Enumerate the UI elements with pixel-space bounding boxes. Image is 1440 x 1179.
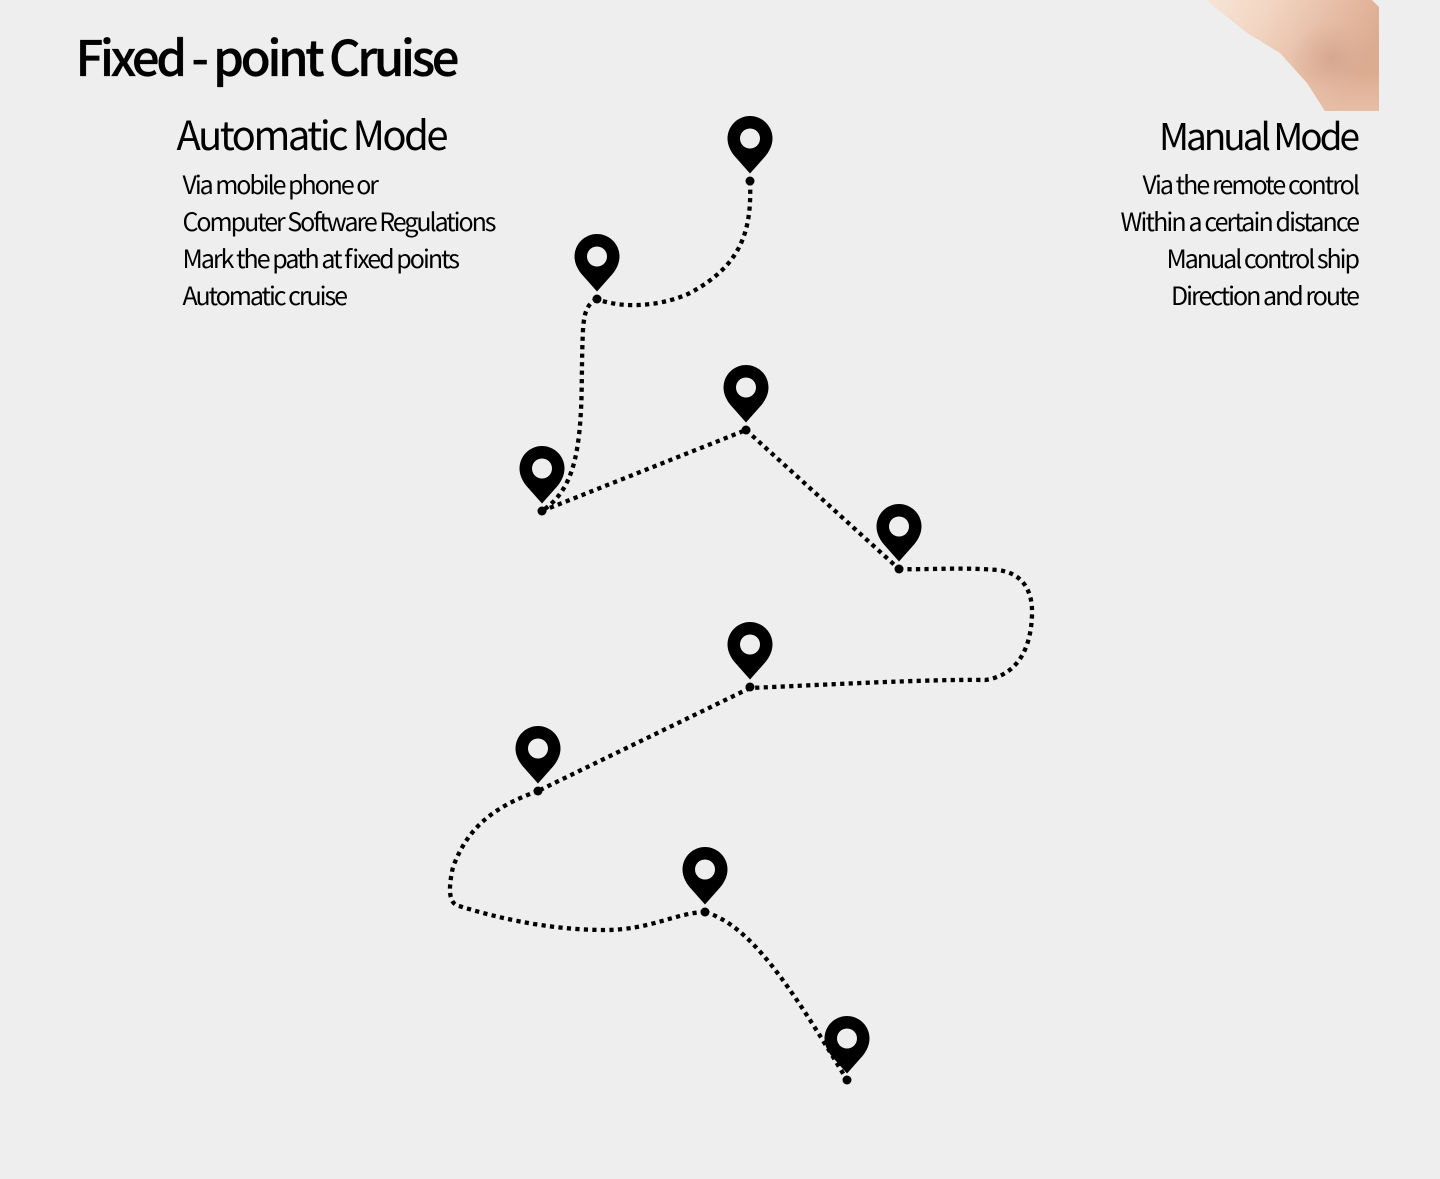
text block: manual mode description: Via the remote control bbox=[1142, 166, 1360, 202]
icon: pin 2 bbox=[574, 234, 620, 304]
icon: pin 9 bbox=[824, 1016, 870, 1084]
text block: manual mode description: Direction and route bbox=[1171, 277, 1360, 313]
icon: pin 4 bbox=[724, 365, 768, 434]
text block: automatic mode description: Computer Software Regulations bbox=[182, 203, 496, 239]
text block: automatic mode description: Mark the path at fixed points bbox=[182, 240, 460, 276]
icon: pin 1 bbox=[728, 116, 772, 186]
text block: automatic mode description: Automatic cruise bbox=[182, 277, 348, 313]
text block: manual mode description: Manual control ship bbox=[1166, 240, 1360, 276]
text block: manual mode description: Within a certain distance bbox=[1120, 203, 1360, 239]
heading: automatic mode: Automatic Mode bbox=[176, 104, 448, 162]
text block: manual mode description bbox=[1120, 166, 1360, 313]
icon: pin 5 bbox=[876, 504, 922, 574]
heading: manual mode: Manual Mode bbox=[1159, 107, 1360, 161]
icon: pin 3 bbox=[520, 446, 564, 516]
icon: pin 8 bbox=[682, 847, 728, 916]
text block: automatic mode description: Via mobile phone or bbox=[182, 166, 379, 202]
dotted cruise route bbox=[450, 181, 1032, 1080]
panel: automatic mode bbox=[176, 104, 496, 313]
icon: pin 6 bbox=[728, 622, 772, 692]
icon: pin 7 bbox=[516, 726, 560, 796]
text block: automatic mode description bbox=[182, 166, 496, 313]
title: Fixed - point Cruise bbox=[76, 20, 460, 91]
panel: manual mode bbox=[1120, 107, 1360, 313]
location markers bbox=[516, 116, 922, 1084]
photo fragment: hand corner bbox=[1200, 0, 1380, 112]
